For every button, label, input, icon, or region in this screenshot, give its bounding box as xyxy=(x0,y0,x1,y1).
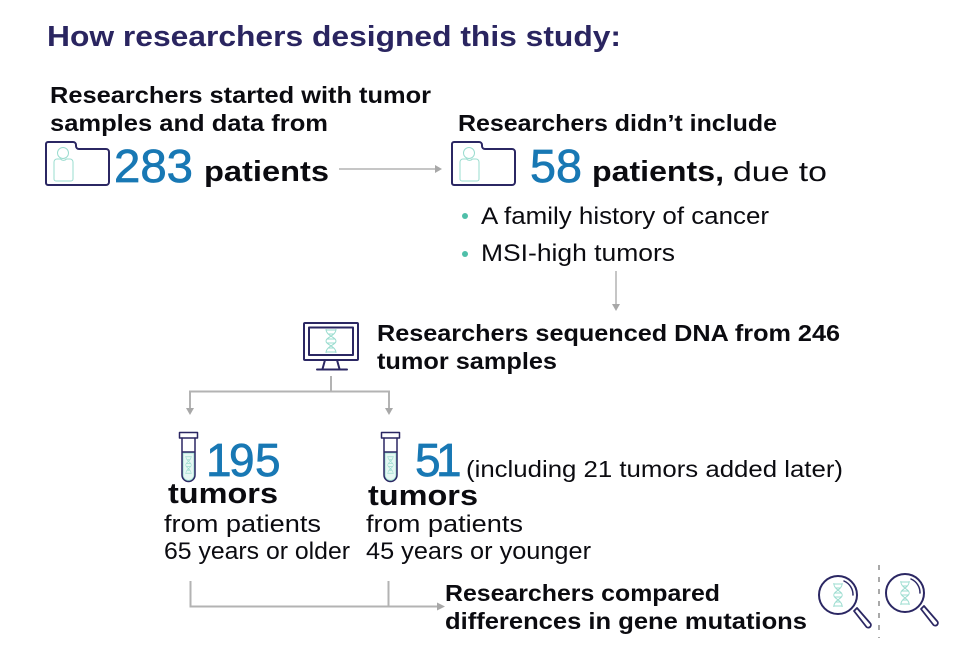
arrow: merge to comparison xyxy=(190,581,445,610)
arrows: split into two groups xyxy=(186,376,393,415)
icon: test tube xyxy=(180,432,198,482)
label: patients,: patients, xyxy=(592,156,724,188)
text: 45 years or younger: 45 years or younger xyxy=(366,538,591,565)
number: 58: 58 xyxy=(530,140,582,192)
panel: comparison xyxy=(445,565,938,638)
arrow: to excluded patients xyxy=(339,165,442,173)
bullet: family history: A family history of cancer xyxy=(481,203,769,230)
text: 65 years or older: 65 years or older xyxy=(164,538,350,565)
label: tumors: tumors xyxy=(168,478,278,510)
icon: test tube xyxy=(382,432,400,482)
panel: sequencing xyxy=(304,320,840,374)
heading: samples and data: samples and data from xyxy=(50,110,328,136)
note: added later: (including 21 tumors added later) xyxy=(466,456,843,482)
heading: started with: Researchers started with tumor xyxy=(50,82,431,108)
title: How researchers designed this study: xyxy=(47,21,621,53)
icon: computer with DNA xyxy=(304,323,358,370)
text: compared differences: Researchers compared xyxy=(445,580,720,606)
icon: magnifier left xyxy=(819,576,871,628)
text: sequenced DNA: Researchers sequenced DNA from 246 xyxy=(377,320,840,346)
heading: did not include: Researchers didn’t include xyxy=(458,110,777,136)
label: tumors: tumors xyxy=(368,480,478,512)
number: 195: 195 xyxy=(206,434,281,486)
icon: excluded patient folder xyxy=(452,142,515,185)
arrow: to sequencing xyxy=(612,271,620,311)
text: from patients: from patients xyxy=(164,511,321,538)
panel: excluded patients xyxy=(452,110,827,267)
text: from patients: from patients xyxy=(366,511,523,538)
text: gene mutations: differences in gene mutations xyxy=(445,608,807,634)
text: tumor samples: tumor samples xyxy=(377,348,557,374)
divider: dashed xyxy=(878,565,880,638)
number: 283: 283 xyxy=(114,140,193,192)
panel: older patients xyxy=(164,432,350,565)
panel: starting patients xyxy=(46,82,431,192)
bullet: MSI-high: MSI-high tumors xyxy=(481,240,675,267)
label: patients: patients xyxy=(204,156,329,188)
number: 51: 51 xyxy=(415,434,462,486)
icon: magnifier right xyxy=(886,574,938,626)
label: due to: due to xyxy=(733,156,827,187)
panel: younger patients xyxy=(366,432,843,565)
icon: patient folder xyxy=(46,142,109,185)
